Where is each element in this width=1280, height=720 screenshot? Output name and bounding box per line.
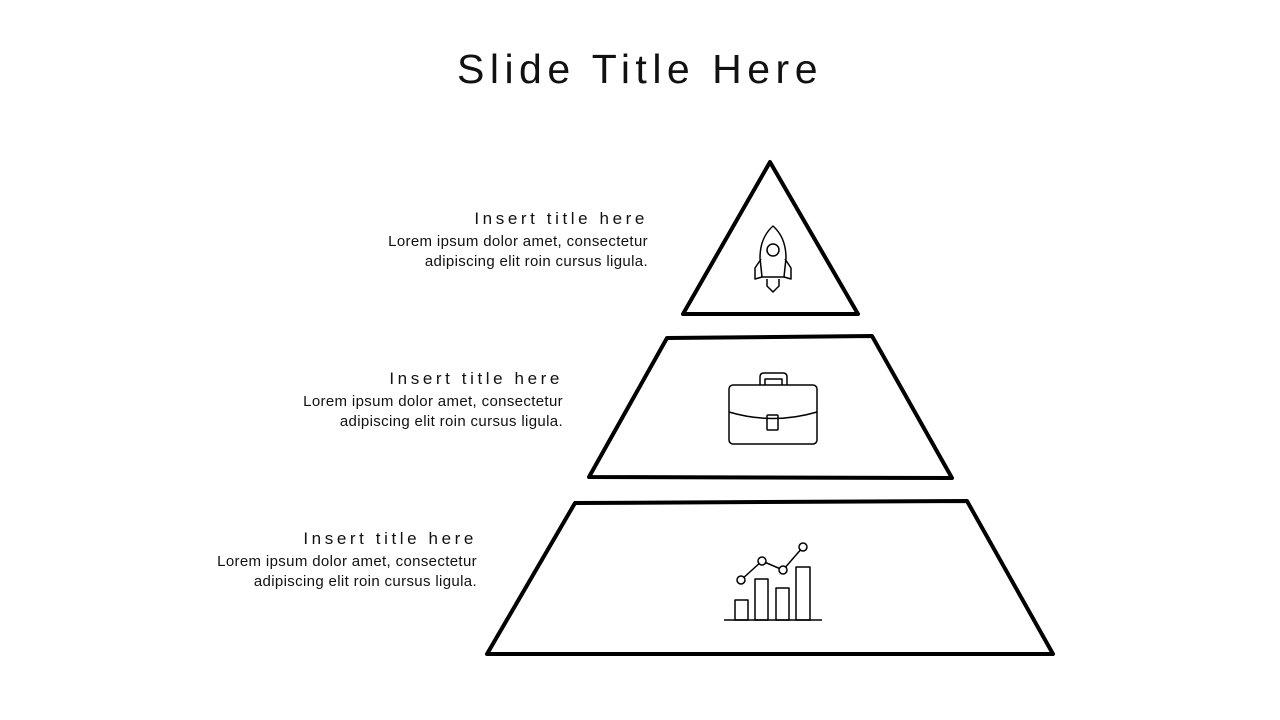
text block: bottom: Insert title here (303, 529, 477, 548)
icon: briefcase (729, 373, 817, 444)
text block: top: adipiscing elit roin cursus ligula. (425, 253, 648, 270)
tier: middle (589, 336, 952, 478)
tier: top triangle (683, 162, 858, 314)
text block: bottom (217, 529, 477, 590)
icon: rocket (755, 226, 791, 292)
text block: top: Insert title here (474, 209, 648, 228)
text block: middle (303, 369, 563, 430)
text block: top: Lorem ipsum dolor amet, consectetur (388, 233, 648, 250)
title: Slide Title Here (457, 46, 823, 92)
text block: middle: adipiscing elit roin cursus ligula. (340, 413, 563, 430)
text block: top (388, 209, 648, 270)
icon: bar chart (724, 543, 822, 620)
tier: bottom (487, 501, 1053, 654)
text block: middle: Insert title here (389, 369, 563, 388)
text block: bottom: adipiscing elit roin cursus ligula. (254, 573, 477, 590)
text block: bottom: Lorem ipsum dolor amet, consectetur (217, 553, 477, 570)
text block: middle: Lorem ipsum dolor amet, consectetur (303, 393, 563, 410)
